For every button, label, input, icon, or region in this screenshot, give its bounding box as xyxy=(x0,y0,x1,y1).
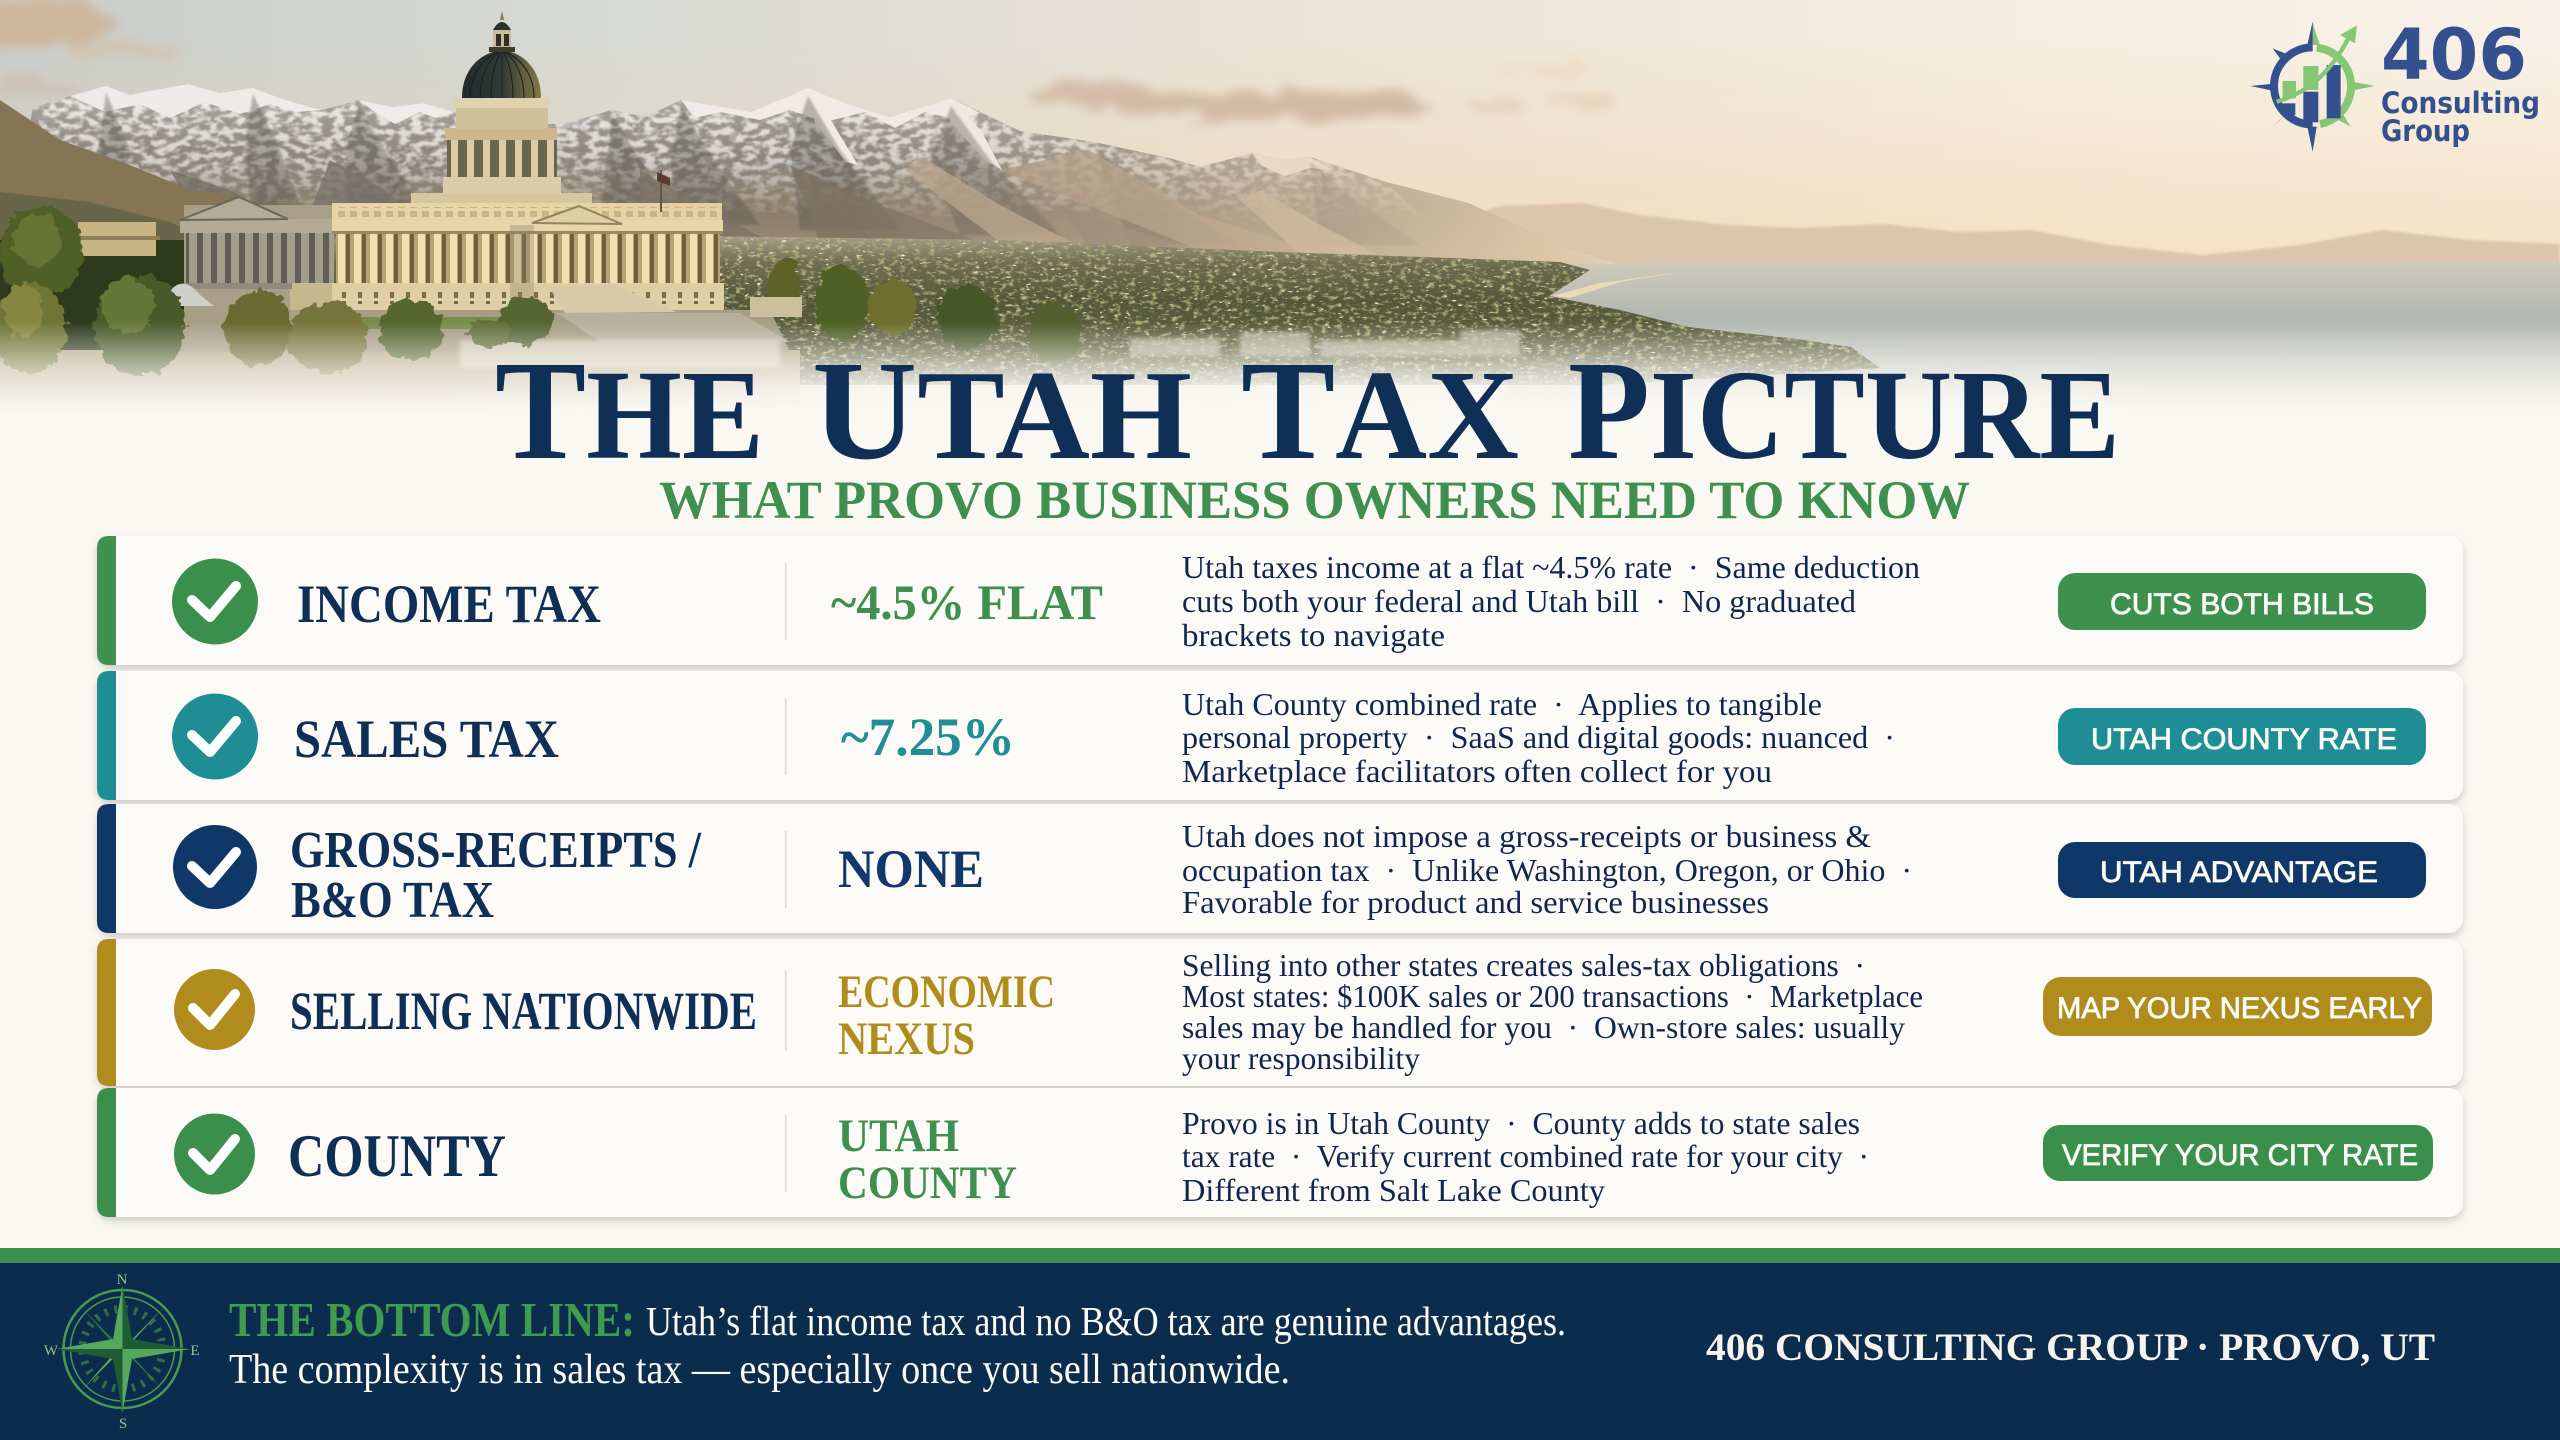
pill badge xyxy=(2043,977,2432,1036)
logo compass mark xyxy=(2251,22,2375,152)
footer banner xyxy=(0,1248,2560,1440)
description: Marketplace facilitators often collect for you xyxy=(1182,753,1772,789)
pill badge: MAP YOUR NEXUS EARLY xyxy=(2057,992,2422,1025)
mountain atmospheric haze xyxy=(800,88,1620,264)
icon: compass rose xyxy=(44,1272,200,1432)
rate value xyxy=(838,1110,1017,1209)
rate value xyxy=(838,966,1055,1065)
capitol dome and drum xyxy=(411,11,592,211)
pill badge: CUTS BOTH BILLS xyxy=(2110,588,2374,621)
icon: green check circle xyxy=(174,1114,255,1194)
description: Utah taxes income at a flat ~4.5% rate · Same deduction xyxy=(1182,549,1920,585)
pill badge: VERIFY YOUR CITY RATE xyxy=(2062,1139,2418,1172)
snow caps xyxy=(70,84,1332,176)
description: Different from Salt Lake County xyxy=(1182,1172,1605,1208)
panel: selling nationwide row xyxy=(97,939,2463,1086)
waterfront buildings xyxy=(1130,330,1520,356)
description: Favorable for product and service businesses xyxy=(1182,884,1769,920)
subtitle: WHAT PROVO BUSINESS OWNERS NEED TO KNOW xyxy=(659,470,1970,530)
rate value: COUNTY xyxy=(838,1157,1017,1209)
bottom line text xyxy=(229,1292,1566,1393)
far ridge xyxy=(1470,203,2560,268)
logo: 406 Consulting Group xyxy=(2251,14,2540,152)
description: Most states: $100K sales or 200 transactions · Marketplace xyxy=(1182,978,1923,1014)
rate value: UTAH xyxy=(838,1110,959,1162)
small white dome xyxy=(160,284,214,306)
description xyxy=(1182,686,1895,789)
valley city xyxy=(200,236,1900,386)
capitol left wing in shadow xyxy=(180,197,334,310)
terrace building xyxy=(750,297,802,317)
mountain spurs xyxy=(170,150,1376,254)
panel: income tax row xyxy=(97,536,2463,665)
pill badge: UTAH ADVANTAGE xyxy=(2100,856,2378,889)
pill badge xyxy=(2058,708,2426,765)
rock facets xyxy=(85,92,1420,245)
main mountain range xyxy=(0,84,1620,264)
pill badge xyxy=(2043,1125,2433,1181)
logo wordmark: 406 xyxy=(2381,14,2527,96)
fog fade into page xyxy=(0,322,2560,422)
row label: COUNTY xyxy=(288,1123,506,1189)
icon: compass rose: E xyxy=(190,1343,200,1359)
title: TAX xyxy=(1241,331,1519,489)
capitol main wing xyxy=(332,203,724,313)
title: UTAH xyxy=(812,331,1192,489)
description: occupation tax · Unlike Washington, Oregon, or Ohio · xyxy=(1182,852,1912,888)
description xyxy=(1182,818,1912,920)
clouds xyxy=(0,0,1614,120)
icon: compass rose: S xyxy=(119,1416,127,1432)
hero photo illustration: capitol, mountains and lake xyxy=(0,0,2560,404)
description xyxy=(1182,549,1920,653)
description xyxy=(1182,947,1923,1076)
panel: gross-receipts row xyxy=(97,804,2463,933)
icon: green check circle xyxy=(172,558,258,644)
logo: 406 Consulting Group: Consulting xyxy=(2381,86,2540,120)
rate value: NEXUS xyxy=(838,1013,975,1065)
rate value: ~4.5% FLAT xyxy=(831,574,1103,630)
icon: compass rose: N xyxy=(117,1272,128,1288)
footer attribution: 406 CONSULTING GROUP · PROVO, UT xyxy=(1706,1326,2435,1369)
description: tax rate · Verify current combined rate for your city · xyxy=(1182,1138,1869,1174)
pill badge: UTAH COUNTY RATE xyxy=(2091,723,2397,756)
logo: 406 Consulting Group: Group xyxy=(2381,114,2470,148)
icon: teal check circle xyxy=(172,694,258,780)
pill badge xyxy=(2058,573,2426,630)
panel: sales tax row xyxy=(97,671,2463,800)
description xyxy=(1182,1105,1869,1208)
row label: B&O TAX xyxy=(291,872,494,929)
bottom line text: Utah’s flat income tax and no B&O tax are genuine advantages. xyxy=(646,1298,1566,1344)
row label: GROSS-RECEIPTS / xyxy=(290,822,701,879)
description: personal property · SaaS and digital goods: nuanced · xyxy=(1182,719,1895,755)
mottled snow field xyxy=(33,84,1420,222)
description: cuts both your federal and Utah bill · No graduated xyxy=(1182,583,1856,619)
description: Utah County combined rate · Applies to tangible xyxy=(1182,686,1822,722)
rate value: ECONOMIC xyxy=(838,966,1055,1018)
icon: navy check circle xyxy=(173,825,257,909)
title: PICTURE xyxy=(1568,331,2120,489)
rate value: NONE xyxy=(838,839,984,899)
panel: county row xyxy=(97,1088,2463,1217)
pill badge xyxy=(2058,842,2426,898)
description: sales may be handled for you · Own-store sales: usually xyxy=(1182,1009,1905,1045)
bottom line text: THE BOTTOM LINE: xyxy=(229,1292,635,1347)
row label: SALES TAX xyxy=(294,709,559,769)
bottom line text: The complexity is in sales tax — especially once you sell nationwide. xyxy=(229,1347,1290,1393)
description: Provo is in Utah County · County adds to state sales xyxy=(1182,1105,1860,1141)
lake xyxy=(1500,262,2560,415)
row label: SELLING NATIONWIDE xyxy=(290,981,757,1041)
icon: gold check circle xyxy=(174,969,255,1050)
left trees and grounds xyxy=(0,222,800,415)
rate value: ~7.25% xyxy=(841,707,1015,767)
left foothill xyxy=(0,100,237,268)
description: your responsibility xyxy=(1182,1040,1420,1076)
title xyxy=(495,331,2120,489)
capitol flag xyxy=(657,170,670,212)
title: THE xyxy=(495,331,764,489)
description: brackets to navigate xyxy=(1182,617,1445,653)
foreground trees xyxy=(0,206,1080,375)
row label xyxy=(290,822,701,929)
row label: INCOME TAX xyxy=(297,574,601,634)
description: Selling into other states creates sales-tax obligations · xyxy=(1182,947,1865,983)
description: Utah does not impose a gross-receipts or business & xyxy=(1182,818,1871,854)
Utah State Capitol building xyxy=(160,11,724,313)
icon: compass rose: W xyxy=(44,1343,59,1359)
